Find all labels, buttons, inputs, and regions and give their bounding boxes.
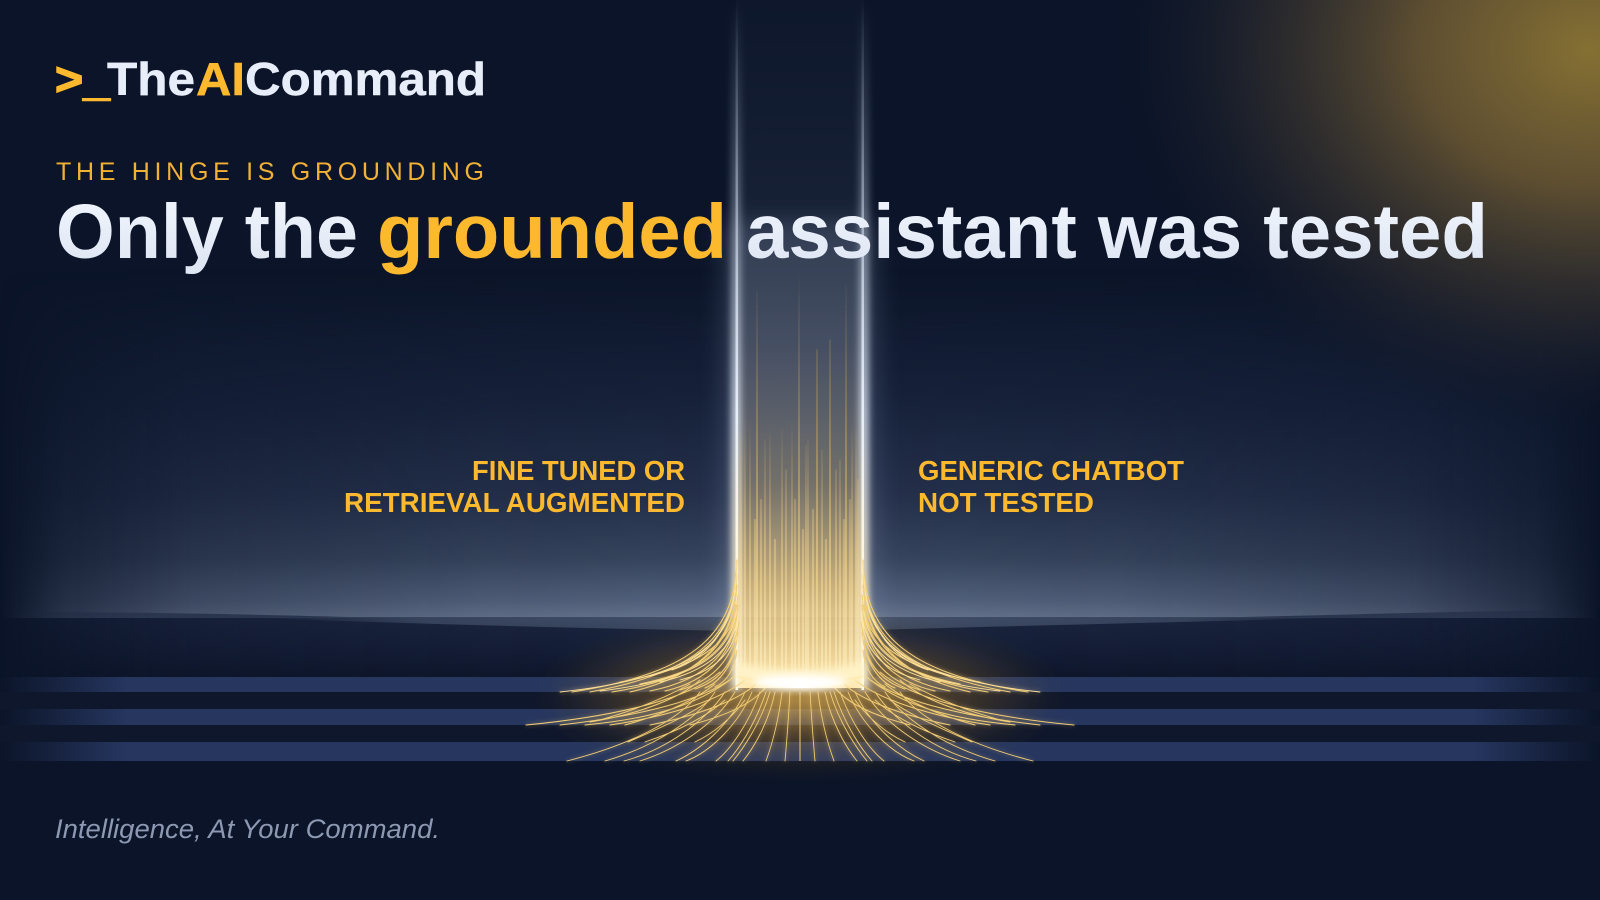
- label: generic chatbot not tested: NOT TESTED: [918, 487, 1094, 518]
- flare halo left: [526, 560, 790, 761]
- logo: [55, 53, 486, 105]
- horizontal bands: [0, 677, 1600, 761]
- column edges: [736, 0, 864, 690]
- title: Only the: [56, 189, 358, 275]
- label: generic chatbot not tested: [918, 455, 1184, 518]
- background: [18, 0, 1600, 618]
- title: assistant was tested: [746, 189, 1488, 275]
- ground horizon: [76, 612, 1524, 664]
- column edge glow: [732, 0, 868, 690]
- flare halo right: [810, 560, 1074, 761]
- column outer glow: [722, 220, 878, 680]
- logo prompt: >_: [55, 53, 110, 105]
- central ray: [799, 692, 801, 761]
- hot base: [735, 662, 865, 689]
- eyebrow: THE HINGE IS GROUNDING: [56, 158, 484, 186]
- label: fine tuned or retrieval augmented: FINE TUNED OR: [472, 455, 685, 486]
- flare strands right: [810, 560, 1074, 761]
- flare strands left: [526, 560, 790, 761]
- column body: [736, 0, 864, 688]
- light strands inside column: [741, 270, 858, 680]
- label: fine tuned or retrieval augmented: [344, 455, 685, 518]
- logo wordmark: The: [107, 53, 195, 105]
- logo: AI: [196, 53, 245, 105]
- logo: Command: [245, 53, 486, 105]
- label: generic chatbot not tested: GENERIC CHATBOT: [918, 455, 1184, 486]
- light column: [722, 0, 878, 690]
- ground glow: [540, 620, 1060, 770]
- title: [56, 189, 1488, 275]
- title: grounded: [377, 189, 727, 275]
- label: fine tuned or retrieval augmented: RETRIEVAL AUGMENTED: [344, 487, 685, 518]
- tagline: Intelligence, At Your Command.: [55, 814, 440, 844]
